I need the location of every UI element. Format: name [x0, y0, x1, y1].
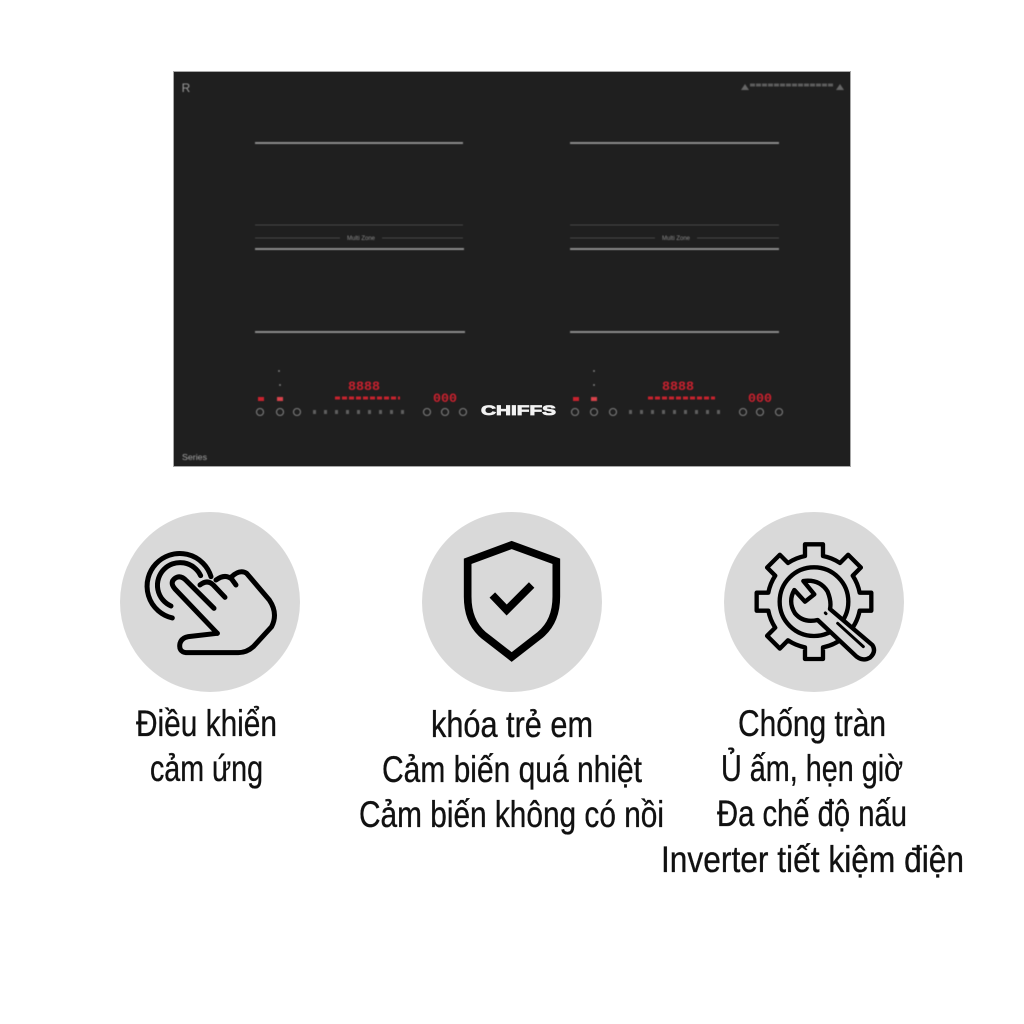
- corner mark: R: [182, 81, 191, 95]
- control panel: right: [572, 370, 782, 416]
- caption: cooking functions: Inverter tiết kiệm điện: [661, 839, 964, 880]
- caption: safety features: Cảm biến không có nồi: [359, 794, 664, 835]
- small logo bottom left: Series: [182, 453, 207, 462]
- caption: cooking functions: [661, 703, 964, 880]
- caption: safety features: [359, 704, 664, 835]
- icon: safety shield: [422, 512, 602, 692]
- cooking zone markers: left: Multi Zone: [347, 236, 376, 242]
- icon: gear and wrench: [724, 512, 904, 692]
- control panel: right: 000: [748, 391, 772, 406]
- caption: touch control: cảm ứng: [150, 748, 263, 789]
- panel: induction cooktop: [173, 71, 851, 467]
- caption: safety features: Cảm biến quá nhiệt: [382, 749, 643, 790]
- control panel: left: [256, 370, 466, 416]
- model label top right: [741, 84, 844, 90]
- icon: touch control: [120, 512, 300, 692]
- caption: safety features: khóa trẻ em: [431, 704, 593, 745]
- brand logo: CHIFFS: [481, 402, 556, 418]
- control panel: left: 000: [433, 391, 457, 406]
- cooking zone markers: right: Multi Zone: [662, 236, 691, 242]
- control panel: right: 8888: [662, 379, 694, 394]
- caption: cooking functions: Chống tràn: [738, 703, 886, 744]
- caption: cooking functions: Ủ ấm, hẹn giờ: [721, 747, 903, 789]
- caption: cooking functions: Đa chế độ nấu: [717, 793, 907, 834]
- control panel: left: 8888: [348, 379, 380, 394]
- caption: touch control: Điều khiển: [136, 703, 277, 744]
- caption: touch control: [136, 703, 277, 789]
